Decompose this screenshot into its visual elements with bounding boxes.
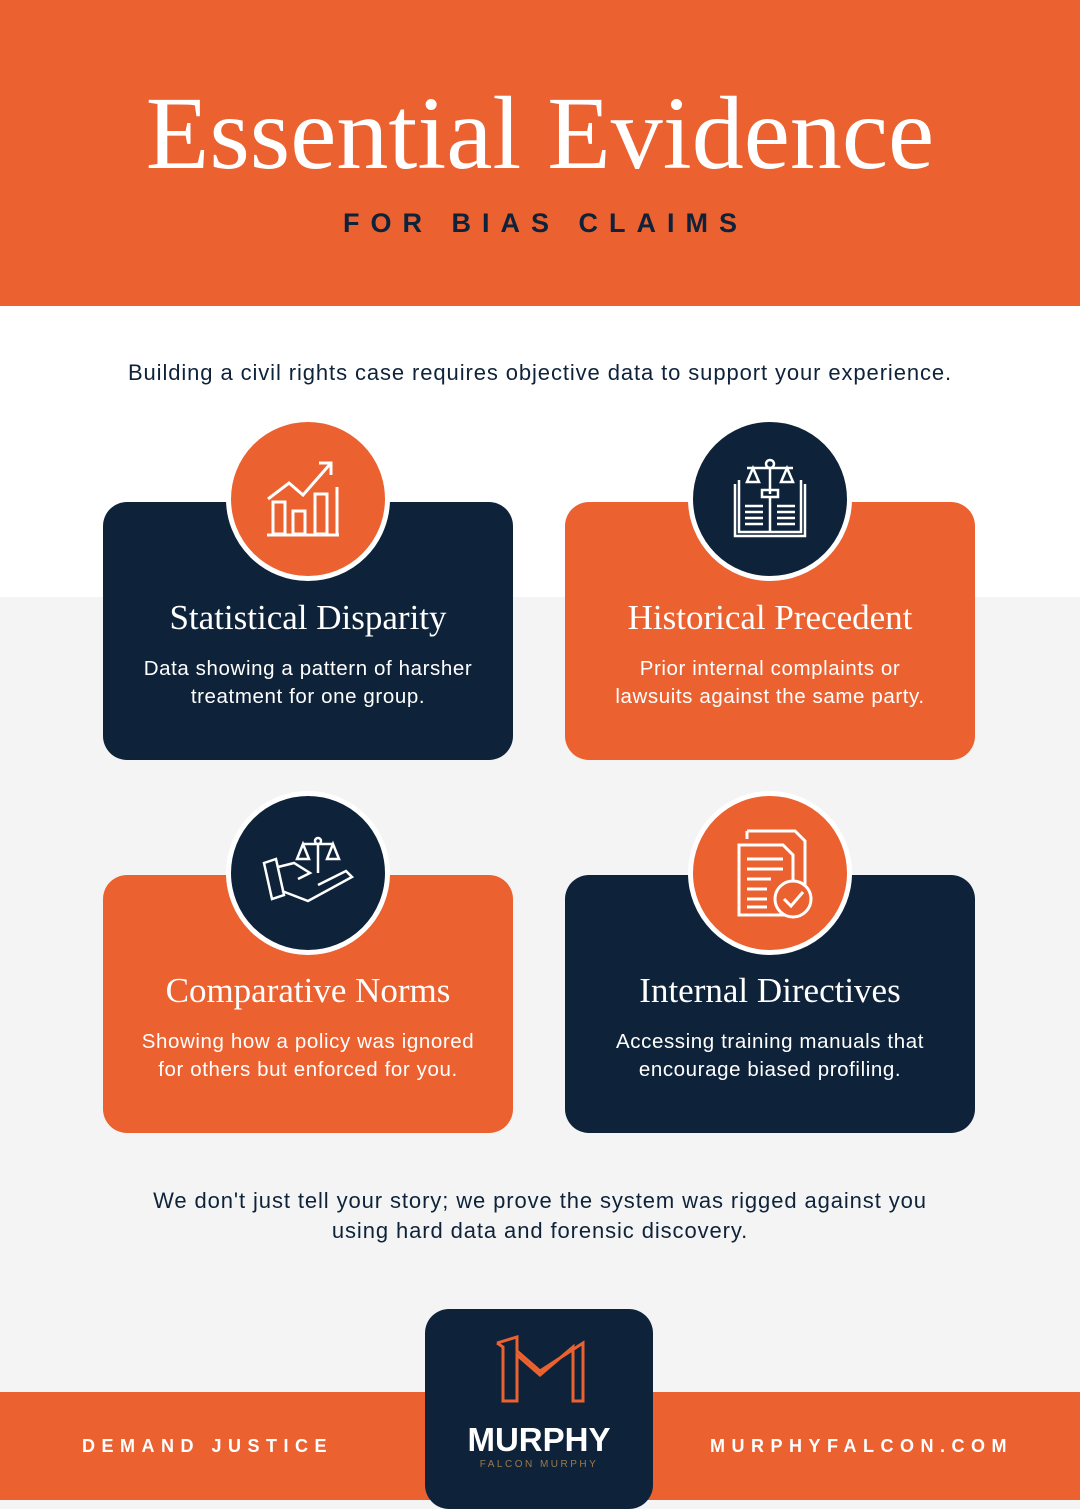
icon: hand with scales	[226, 791, 390, 955]
panel: statistical disparity: Statistical Disparity	[169, 598, 447, 637]
panel: historical precedent: lawsuits against the same party.	[615, 685, 925, 708]
icon: documents with check	[688, 791, 852, 955]
panel: comparative norms: Showing how a policy was ignored	[142, 1030, 474, 1053]
panel: internal directives: Accessing training manuals that	[616, 1030, 924, 1053]
title: Essential Evidence	[146, 76, 934, 191]
logo block: FALCON MURPHY	[480, 1459, 598, 1470]
panel: historical precedent: Prior internal complaints or	[640, 657, 900, 680]
footer bar	[0, 1392, 1080, 1500]
logo text: MURPHY	[467, 1421, 610, 1458]
panel: internal directives	[565, 875, 975, 1133]
panel: statistical disparity: Data showing a pattern of harsher	[144, 657, 472, 680]
subtitle: FOR BIAS CLAIMS	[343, 208, 748, 238]
panel: statistical disparity	[103, 502, 513, 760]
panel: historical precedent	[565, 502, 975, 760]
closing text	[153, 1188, 927, 1243]
closing text: using hard data and forensic discovery.	[332, 1218, 748, 1243]
logo block	[425, 1309, 653, 1509]
panel: comparative norms: Comparative Norms	[166, 971, 450, 1010]
closing text: We don't just tell your story; we prove the system was rigged against you	[153, 1188, 927, 1213]
panel: comparative norms: for others but enforced for you.	[158, 1058, 458, 1081]
panel: statistical disparity: treatment for one group.	[191, 685, 425, 708]
footer left text: DEMAND JUSTICE	[82, 1436, 333, 1456]
panel: internal directives: Internal Directives	[639, 971, 901, 1010]
header	[0, 0, 1080, 306]
logo mark	[496, 1335, 584, 1402]
icon: chart	[226, 417, 390, 581]
panel: comparative norms	[103, 875, 513, 1133]
panel: historical precedent: Historical Precedent	[628, 598, 912, 637]
icon: law book	[688, 417, 852, 581]
intro text: Building a civil rights case requires objective data to support your experience.	[128, 360, 952, 385]
footer right text: MURPHYFALCON.COM	[710, 1436, 1013, 1456]
panel: internal directives: encourage biased profiling.	[639, 1058, 901, 1081]
